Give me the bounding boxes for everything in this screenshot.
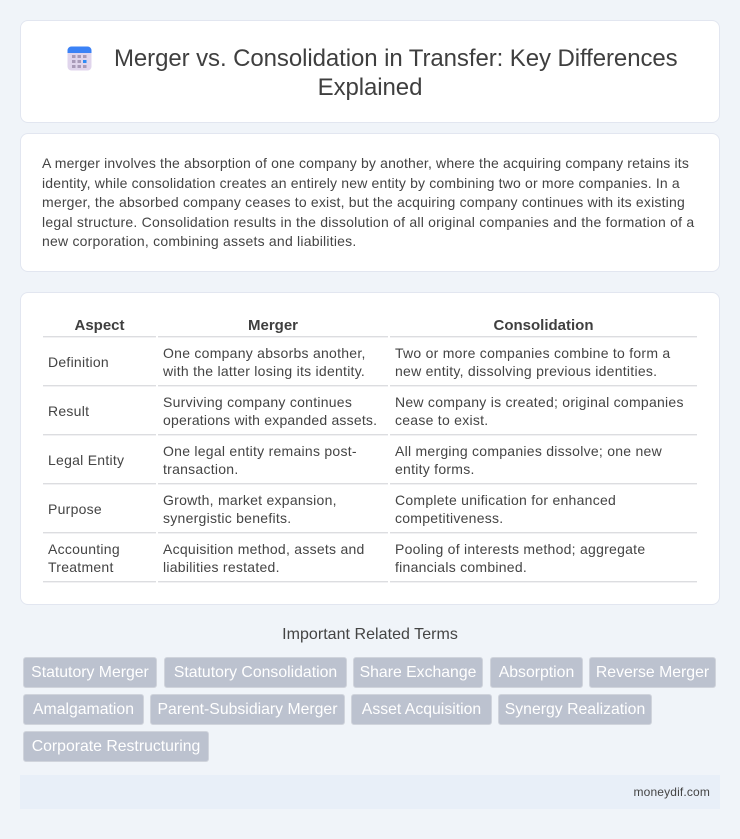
tag [589, 657, 716, 688]
row: legal entity: One legal entity remains post- [163, 443, 357, 459]
tag: Absorption [499, 664, 574, 681]
row: accounting treatment: Pooling of interests method; aggregate [395, 541, 645, 557]
tag [23, 657, 157, 688]
row: definition: with the latter losing its identity. [163, 363, 365, 379]
row: accounting treatment: Acquisition method, assets and [163, 541, 365, 557]
panel: header [20, 20, 720, 123]
row: result [48, 394, 684, 428]
column heading: consolidation: Consolidation [494, 317, 594, 334]
tag [150, 694, 345, 725]
row: accounting treatment: liabilities restated. [163, 559, 280, 575]
row: purpose [48, 492, 616, 526]
panel: comparison table [20, 292, 720, 605]
footer bar [20, 775, 720, 809]
row: accounting treatment: financials combined. [395, 559, 527, 575]
row: accounting treatment: Treatment [48, 559, 114, 575]
row: definition: Definition [48, 354, 109, 370]
row: purpose: Growth, market expansion, [163, 492, 337, 508]
row: legal entity: entity forms. [395, 461, 475, 477]
tag [351, 694, 492, 725]
tag: Statutory Merger [31, 664, 149, 681]
row: purpose: competitiveness. [395, 510, 503, 526]
row: result: Surviving company continues [163, 394, 352, 410]
row: legal entity [48, 443, 662, 477]
title [114, 45, 678, 101]
row: legal entity: All merging companies dissolve; one new [395, 443, 662, 459]
text block: introduction: merger, the absorbed company ceases to exist, but the acquiring company continues with its existing [42, 194, 685, 210]
row: legal entity: transaction. [163, 461, 238, 477]
footer: site name: moneydif.com [634, 785, 710, 799]
text block: introduction [42, 155, 694, 249]
row: definition: new entity, dissolving previous identities. [395, 363, 657, 379]
text block: introduction: A merger involves the absorption of one company by another, where the acquiring company retains its [42, 155, 689, 171]
row: purpose: Complete unification for enhanced [395, 492, 616, 508]
tag: Parent-Subsidiary Merger [158, 701, 337, 718]
tag: Corporate Restructuring [32, 738, 200, 755]
tag [498, 694, 652, 725]
tag group: related terms [23, 657, 716, 762]
row: result: Result [48, 403, 89, 419]
tag: Share Exchange [360, 664, 476, 681]
title: Merger vs. Consolidation in Transfer: Key Differences [114, 45, 678, 72]
text block: introduction: new corporation, combining assets and liabilities. [42, 233, 356, 249]
row: definition [48, 345, 670, 379]
title: Explained [318, 74, 422, 101]
row: accounting treatment: Accounting [48, 541, 120, 557]
row: purpose: Purpose [48, 501, 102, 517]
tag [353, 657, 483, 688]
text block: introduction: legal structure. Consolidation results in the dissolution of all original companies and the formation of a [42, 214, 694, 230]
tag: Amalgamation [33, 701, 134, 718]
row: legal entity: Legal Entity [48, 452, 124, 468]
text block: introduction: identity, while consolidation creates an entirely new entity by combining two or more companies. In a [42, 175, 680, 191]
tag [23, 694, 144, 725]
row: definition: Two or more companies combine to form a [395, 345, 670, 361]
tag: Statutory Consolidation [174, 664, 337, 681]
tag [164, 657, 347, 688]
column heading: aspect: Aspect [74, 317, 125, 334]
row: result: New company is created; original companies [395, 394, 684, 410]
row: accounting treatment [48, 541, 645, 575]
tag [23, 731, 209, 762]
tag: Reverse Merger [596, 664, 709, 681]
tag [490, 657, 583, 688]
row: result: cease to exist. [395, 412, 488, 428]
icon: calendar [68, 46, 92, 70]
tag: Synergy Realization [505, 701, 645, 718]
column heading: merger: Merger [248, 317, 298, 334]
tag: Asset Acquisition [362, 701, 481, 718]
heading: important related terms: Important Related Terms [282, 626, 458, 643]
panel: intro text [20, 133, 720, 272]
row: purpose: synergistic benefits. [163, 510, 291, 526]
row: definition: One company absorbs another, [163, 345, 366, 361]
row: result: operations with expanded assets. [163, 412, 377, 428]
